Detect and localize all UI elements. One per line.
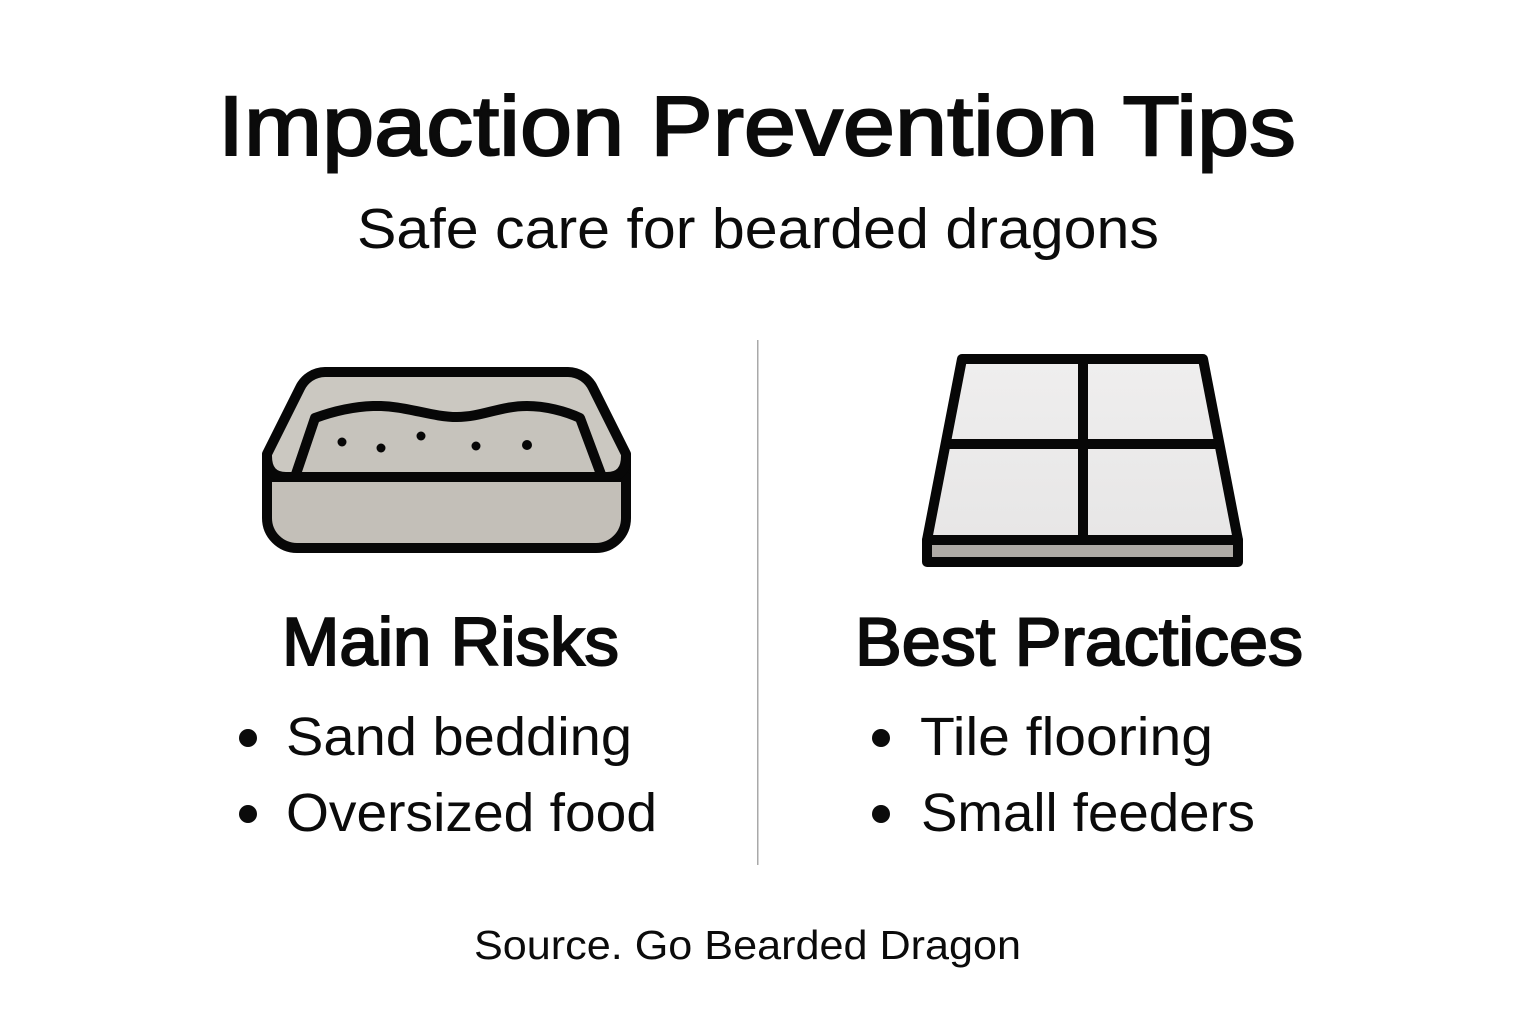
title: Impaction Prevention Tips <box>218 79 1296 173</box>
panel: main risks <box>239 372 657 843</box>
list item: tile flooring: Tile flooring <box>920 707 1213 767</box>
list item: small feeders: Small feeders <box>921 783 1255 843</box>
panel: best practices <box>855 359 1303 843</box>
heading: main risks: Main Risks <box>282 604 619 680</box>
vertical divider <box>757 340 758 865</box>
heading: best practices: Best Practices <box>855 604 1303 680</box>
list item: oversized food: Oversized food <box>286 783 657 843</box>
source note: Source. Go Bearded Dragon <box>474 922 1021 968</box>
subtitle: Safe care for bearded dragons <box>357 197 1159 261</box>
icon: tile flooring <box>927 359 1238 562</box>
list item: sand bedding: Sand bedding <box>286 707 632 767</box>
icon: sand bedding tray <box>267 372 626 548</box>
